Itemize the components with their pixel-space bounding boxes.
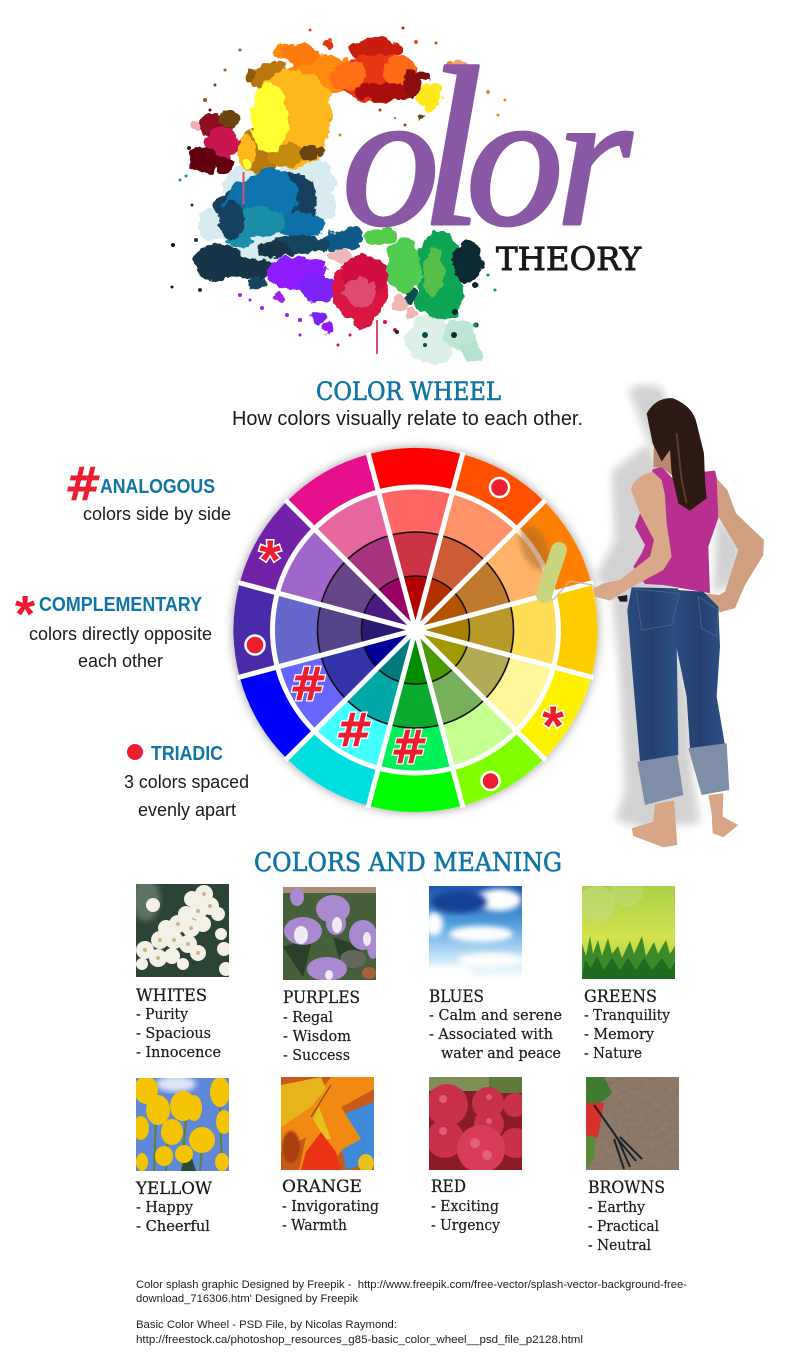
card: red: - Urgency (431, 1216, 500, 1234)
title subword: THEORY (496, 240, 642, 278)
title script word: o (466, 51, 564, 267)
photo: purple flowers (283, 887, 376, 980)
card: browns: - Practical (588, 1217, 659, 1235)
outer ring: pure hues (233, 448, 598, 812)
title script word: r (556, 51, 633, 267)
icon: hash: # (64, 457, 100, 511)
card: blues: BLUES (429, 987, 484, 1007)
hair (647, 398, 707, 511)
credits (136, 1279, 687, 1346)
photo: blue sky with clouds (429, 886, 522, 976)
woman with paint roller (593, 398, 764, 847)
woman's shadow on the wall (595, 385, 743, 828)
legend: triadic: TRIADIC (151, 743, 223, 765)
splatter droplets (170, 26, 506, 347)
card: browns: - Neutral (588, 1236, 651, 1254)
card: yellow: - Cheerful (136, 1217, 210, 1235)
credits: download_716306.htm' Designed by Freepik (136, 1293, 359, 1305)
card: blues (421, 886, 562, 1062)
heading: color wheel: COLOR WHEEL (316, 377, 501, 406)
legend: complementary: each other (78, 651, 163, 671)
photo: raspberries (429, 1077, 522, 1170)
legend: complementary (15, 586, 212, 671)
card: orange: - Invigorating (282, 1197, 379, 1215)
second ring: tints (273, 487, 558, 773)
card: blues: water and peace (441, 1044, 561, 1062)
card: red (426, 1077, 530, 1234)
card: yellow: YELLOW (135, 1179, 213, 1199)
card: whites (132, 877, 233, 1061)
photo: white blossoms (136, 884, 229, 977)
wheel markers: analogous hashes (289, 657, 426, 774)
card: purples: - Wisdom (283, 1027, 351, 1045)
card: purples (283, 887, 379, 1064)
card: yellow (133, 1076, 232, 1235)
wheel markers: analogous hashes: # (335, 703, 371, 757)
photo: soil with rake (586, 1077, 679, 1170)
card: browns (586, 1077, 679, 1254)
jean cuffs (637, 743, 729, 805)
card: browns: BROWNS (588, 1178, 665, 1198)
title script word: o (342, 51, 440, 267)
icon: dot (127, 744, 143, 760)
inner ring: shades (361, 576, 470, 684)
wheel shadow (234, 448, 598, 812)
card: whites: WHITES (136, 986, 207, 1006)
card: purples: PURPLES (283, 988, 360, 1008)
wheel markers: complementary asterisks: * (259, 528, 281, 591)
magenta tank top (633, 467, 721, 593)
legend: analogous: colors side by side (83, 504, 231, 524)
photo: autumn leaf (281, 1077, 374, 1170)
card: purples: - Success (283, 1046, 350, 1064)
roller handle (617, 595, 627, 602)
card: red: - Exciting (431, 1197, 499, 1215)
card: greens: GREENS (584, 987, 657, 1007)
wheel markers: complementary asterisks (259, 528, 564, 757)
splash drips (242, 172, 378, 354)
wheel markers: complementary asterisks: * (542, 694, 564, 757)
paint smear on wheel (513, 521, 557, 575)
card: greens: - Memory (584, 1025, 654, 1043)
card: orange: ORANGE (282, 1177, 362, 1197)
card: blues: - Associated with (429, 1025, 553, 1043)
card: orange: - Warmth (282, 1216, 347, 1234)
card: blues: - Calm and serene (429, 1006, 562, 1024)
card: greens (579, 875, 675, 1062)
legend: triadic (124, 743, 249, 820)
right arm (703, 478, 764, 612)
splash graphic: paint splatter forming the letter C (189, 38, 485, 364)
subheading: How colors visually relate to each other. (232, 408, 583, 430)
card: orange (281, 1077, 379, 1234)
color wheel (233, 448, 598, 812)
card: greens: - Nature (584, 1044, 642, 1062)
card: whites: - Innocence (136, 1043, 221, 1061)
paint roller (541, 550, 592, 600)
legend: analogous: ANALOGOUS (100, 476, 215, 498)
left arm (593, 472, 672, 601)
credits: Color splash graphic Designed by Freepik - http://www.freepik.com/free-vector/splash-vector-background-free- (136, 1279, 687, 1291)
neck (653, 437, 673, 477)
heading: colors and meaning: COLORS AND MEANING (254, 848, 562, 878)
legend: complementary: colors directly opposite (29, 624, 212, 644)
card: browns: - Earthy (588, 1198, 645, 1216)
photo: yellow tulips (136, 1078, 229, 1171)
card: whites: - Spacious (136, 1024, 211, 1042)
photo: green grass (582, 886, 675, 979)
credits: Basic Color Wheel - PSD File, by Nicolas Raymond: (136, 1319, 397, 1331)
legend: analogous (64, 457, 231, 524)
jean pockets (636, 589, 718, 637)
legend: triadic: 3 colors spaced (124, 772, 249, 792)
wheel markers: analogous hashes: # (390, 720, 426, 774)
card: greens: - Tranquility (584, 1006, 670, 1024)
legend: triadic: evenly apart (138, 800, 236, 820)
third ring: tones (317, 532, 514, 728)
title script word: l (420, 22, 483, 274)
card: yellow: - Happy (136, 1198, 193, 1216)
legend: complementary: COMPLEMENTARY (39, 594, 203, 616)
card: red: RED (431, 1177, 466, 1197)
wheel markers: analogous hashes: # (289, 657, 325, 711)
bare feet (632, 793, 738, 847)
icon: asterisk: * (15, 586, 36, 644)
jeans (627, 587, 725, 762)
wheel markers: triadic dots (246, 478, 509, 790)
card: purples: - Regal (283, 1008, 333, 1026)
card: whites: - Purity (136, 1005, 188, 1023)
credits: http://freestock.ca/photoshop_resources_g85-basic_color_wheel__psd_file_p2128.html (136, 1334, 583, 1346)
